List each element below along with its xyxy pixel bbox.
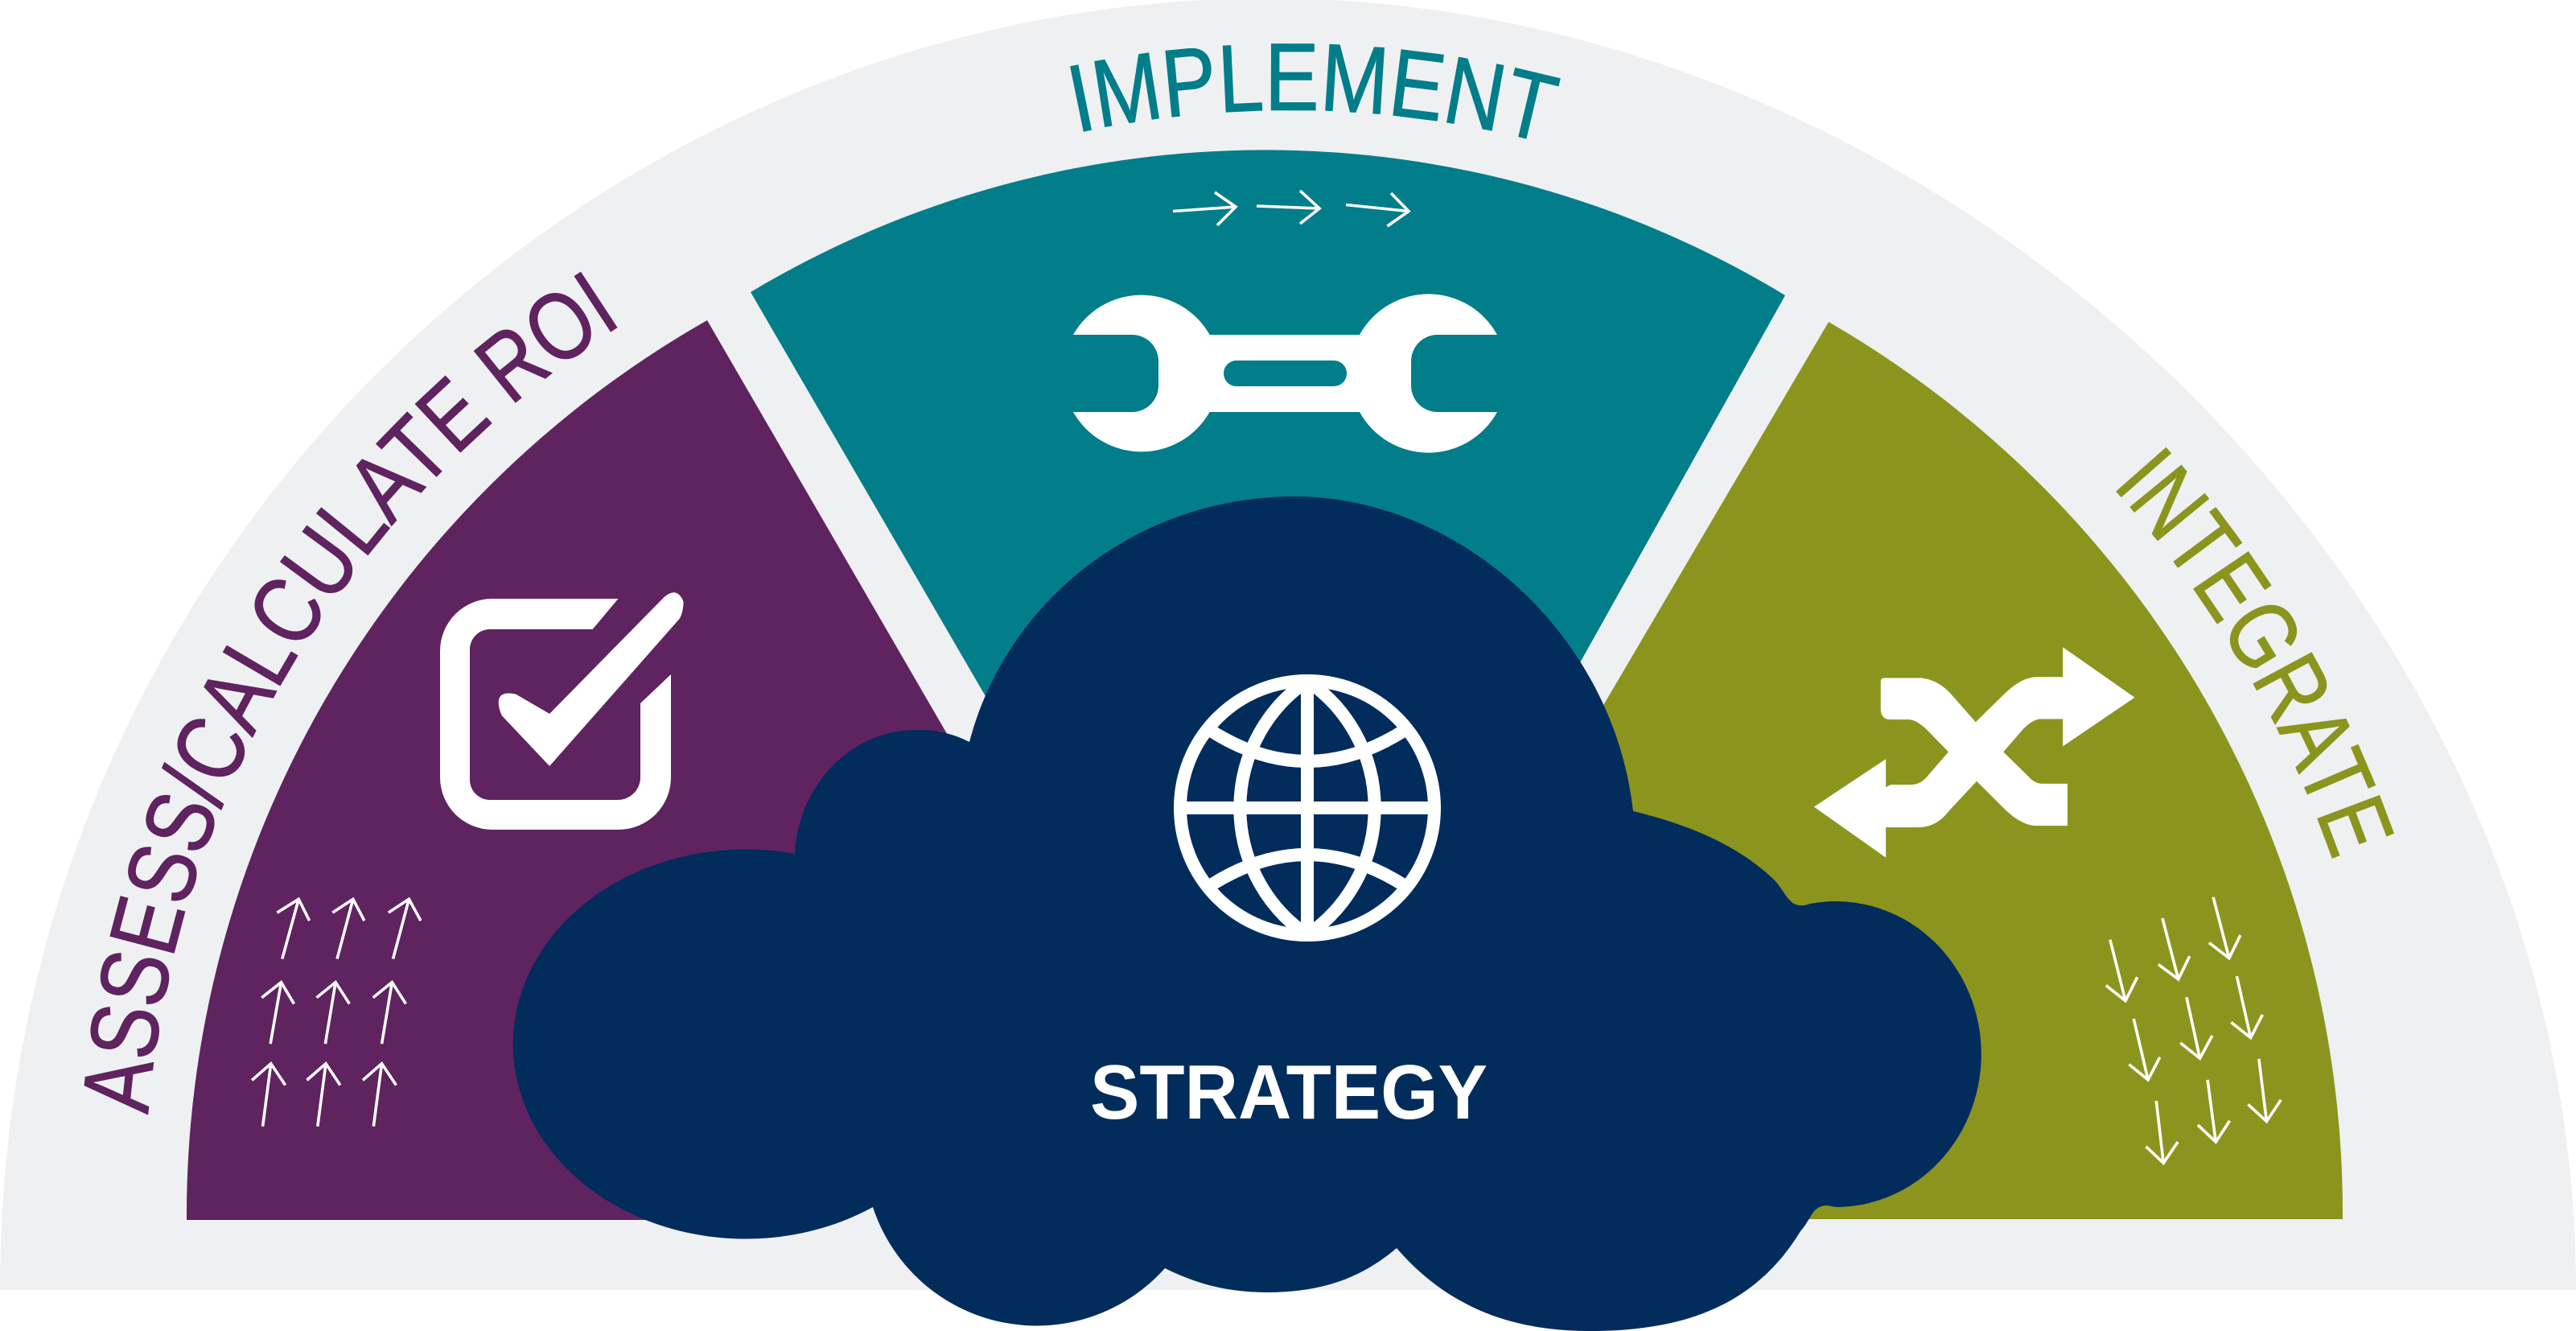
icon: double-ended wrench [1073, 294, 1497, 453]
title: strategy: STRATEGY [1090, 1049, 1488, 1135]
arrows: three rightward arrows [1173, 191, 1409, 226]
heading: assess/calculate ROI: ASSESS/CALCULATE ROI [84, 272, 618, 1115]
teal segment [751, 150, 1785, 1201]
heading: integrate: INTEGRATE [2116, 447, 2394, 859]
panel: strategy cloud [513, 497, 1981, 1331]
arrows: nine downward arrows [2106, 897, 2281, 1163]
olive segment [1529, 322, 2343, 1219]
icon: crossing shuffle arrows [1814, 647, 2134, 858]
icon: checkbox with tick [440, 592, 684, 830]
arrows: nine upward arrows [252, 899, 421, 1127]
panel: assess / calculate ROI [84, 272, 947, 1220]
heading: implement: IMPLEMENT [1070, 43, 1561, 139]
panel: implement [751, 43, 1785, 696]
navy cloud shape [513, 497, 1981, 1331]
purple segment [187, 320, 993, 1220]
icon: globe [1180, 681, 1434, 935]
panel: integrate [1603, 322, 2394, 1219]
